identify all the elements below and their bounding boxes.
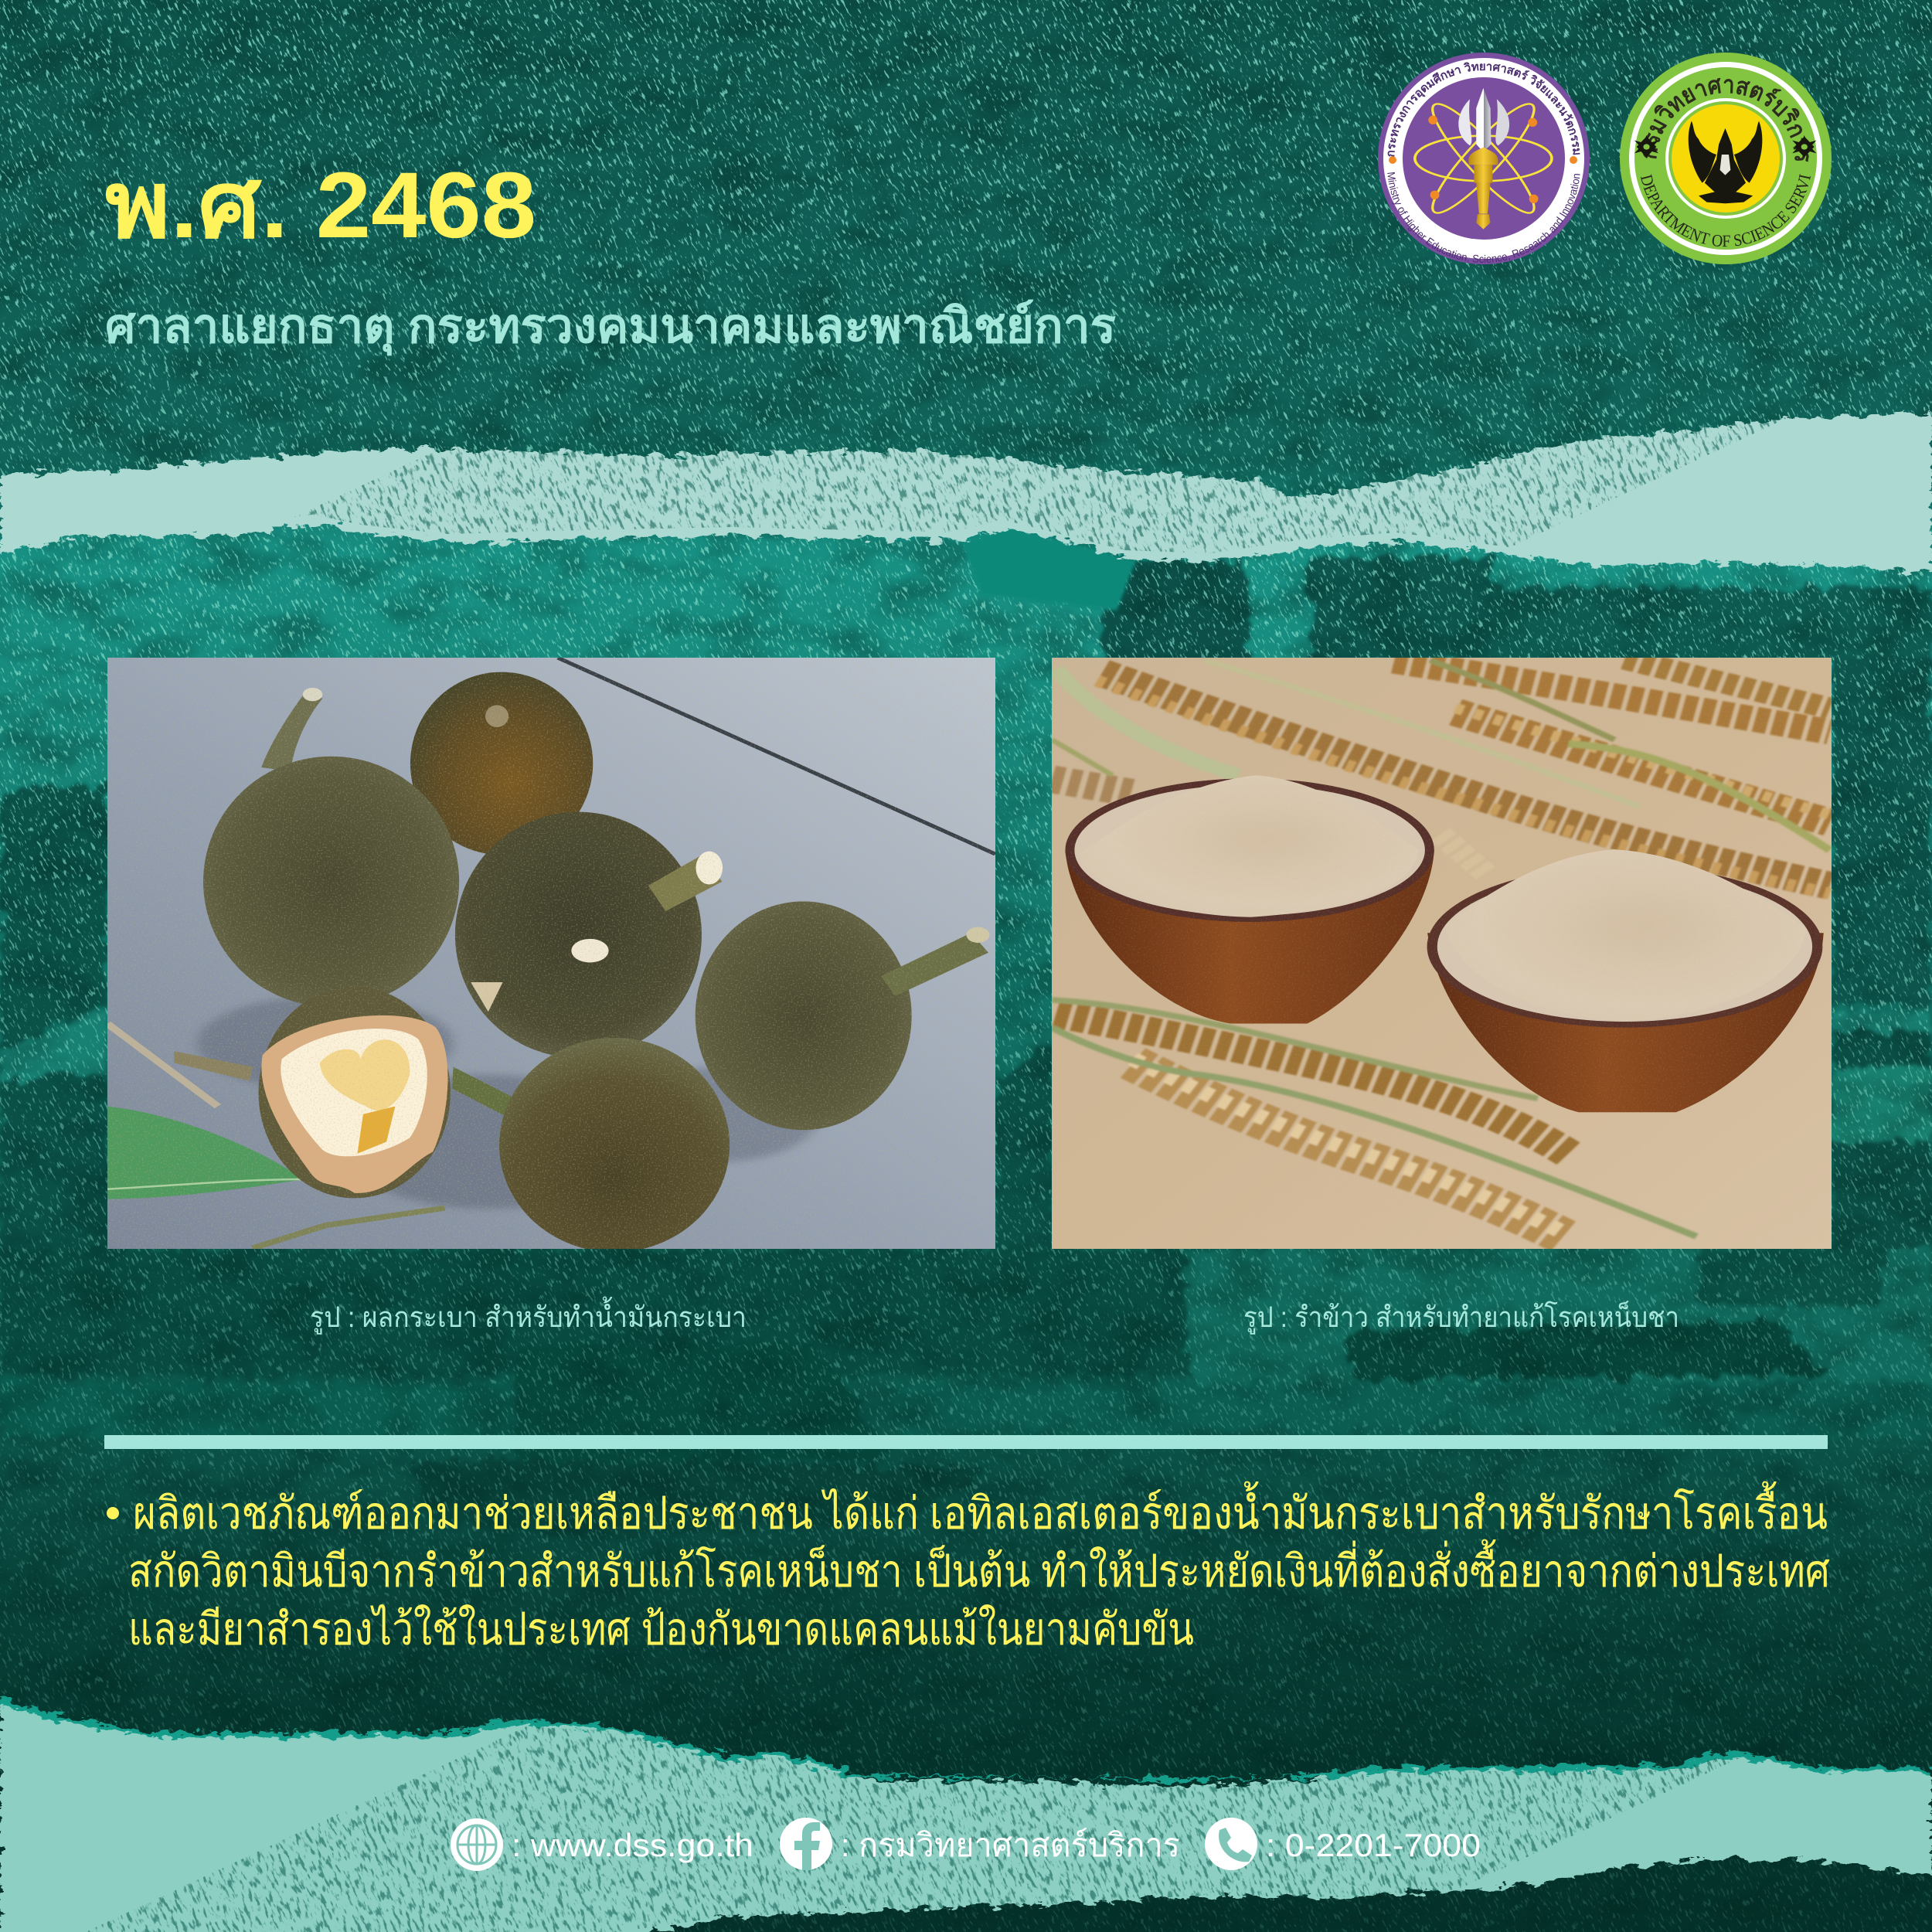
fruit B back [410, 672, 593, 855]
left bowl [1065, 850, 1434, 1023]
fruit E bottom [499, 1038, 730, 1252]
ministry seal ring text [1384, 60, 1583, 265]
twig bottom [253, 1208, 444, 1248]
body text [107, 1481, 1830, 1655]
fruit fuzz grain [107, 658, 995, 1249]
ministry seal emblem [1415, 88, 1552, 230]
rice stalks upper [1052, 659, 1830, 893]
photo: krabao fruits [107, 658, 995, 1252]
website: : www.dss.go.th [512, 1827, 753, 1863]
leaf [107, 1107, 303, 1199]
photo: rice bran bowls [1052, 658, 1832, 1249]
logo: department of science service seal [0, 0, 1832, 264]
title: year: พ.ศ. 2468 [105, 152, 536, 257]
icon: phone [1205, 1818, 1257, 1870]
caption: rice bran: รูป : รำข้าว สำหรับทำยาแก้โรคเหน็บชา [1243, 1299, 1679, 1335]
footer contacts [451, 1818, 1481, 1871]
department seal garuda and stars [1634, 121, 1816, 203]
bottom torn paper strip [0, 1696, 1932, 1932]
right bowl [1427, 933, 1824, 1112]
stone grain [1052, 658, 1832, 1249]
facebook name: : กรมวิทยาศาสตร์บริการ [841, 1827, 1180, 1863]
twig left [107, 1023, 218, 1107]
phone number: : 0-2201-7000 [1266, 1827, 1481, 1863]
fruit C center [455, 812, 702, 1058]
caption: krabao fruit: รูป : ผลกระเบา สำหรับทำน้ำมันกระเบา [310, 1296, 747, 1335]
subtitle: ศาลาแยกธาตุ กระทรวงคมนาคมและพาณิชย์การ [105, 299, 1116, 355]
cut fruit [258, 987, 451, 1198]
ministry seal ring text: กระทรวงการอุดมศึกษา วิทยาศาสตร์ วิจัยและนวัตกรรม [1388, 62, 1580, 157]
background silhouettes: trees and building [0, 556, 1932, 1538]
bullet [107, 1507, 119, 1519]
wood lines and shadows [558, 658, 995, 854]
fruit D right [696, 901, 912, 1130]
logo: ministry seal [1378, 53, 1590, 265]
ministry seal ring text: Ministry of Higher Education, Science, Research and Innovation [1387, 172, 1580, 263]
icon: facebook [780, 1818, 832, 1870]
fruit A left [261, 692, 322, 771]
top torn paper strip [0, 409, 1932, 612]
icon: globe [451, 1818, 503, 1871]
department ring text: กรมวิทยาศาสตร์บริการ [1643, 77, 1809, 162]
fruit stems [174, 1051, 253, 1080]
rice stalks lower [1052, 1000, 1696, 1236]
divider bar [104, 1435, 1828, 1449]
body text: และมียาสำรองไว้ใช้ในประเทศ ป้องกันขาดแคลนแม้ในยามคับขัน [128, 1604, 1194, 1655]
